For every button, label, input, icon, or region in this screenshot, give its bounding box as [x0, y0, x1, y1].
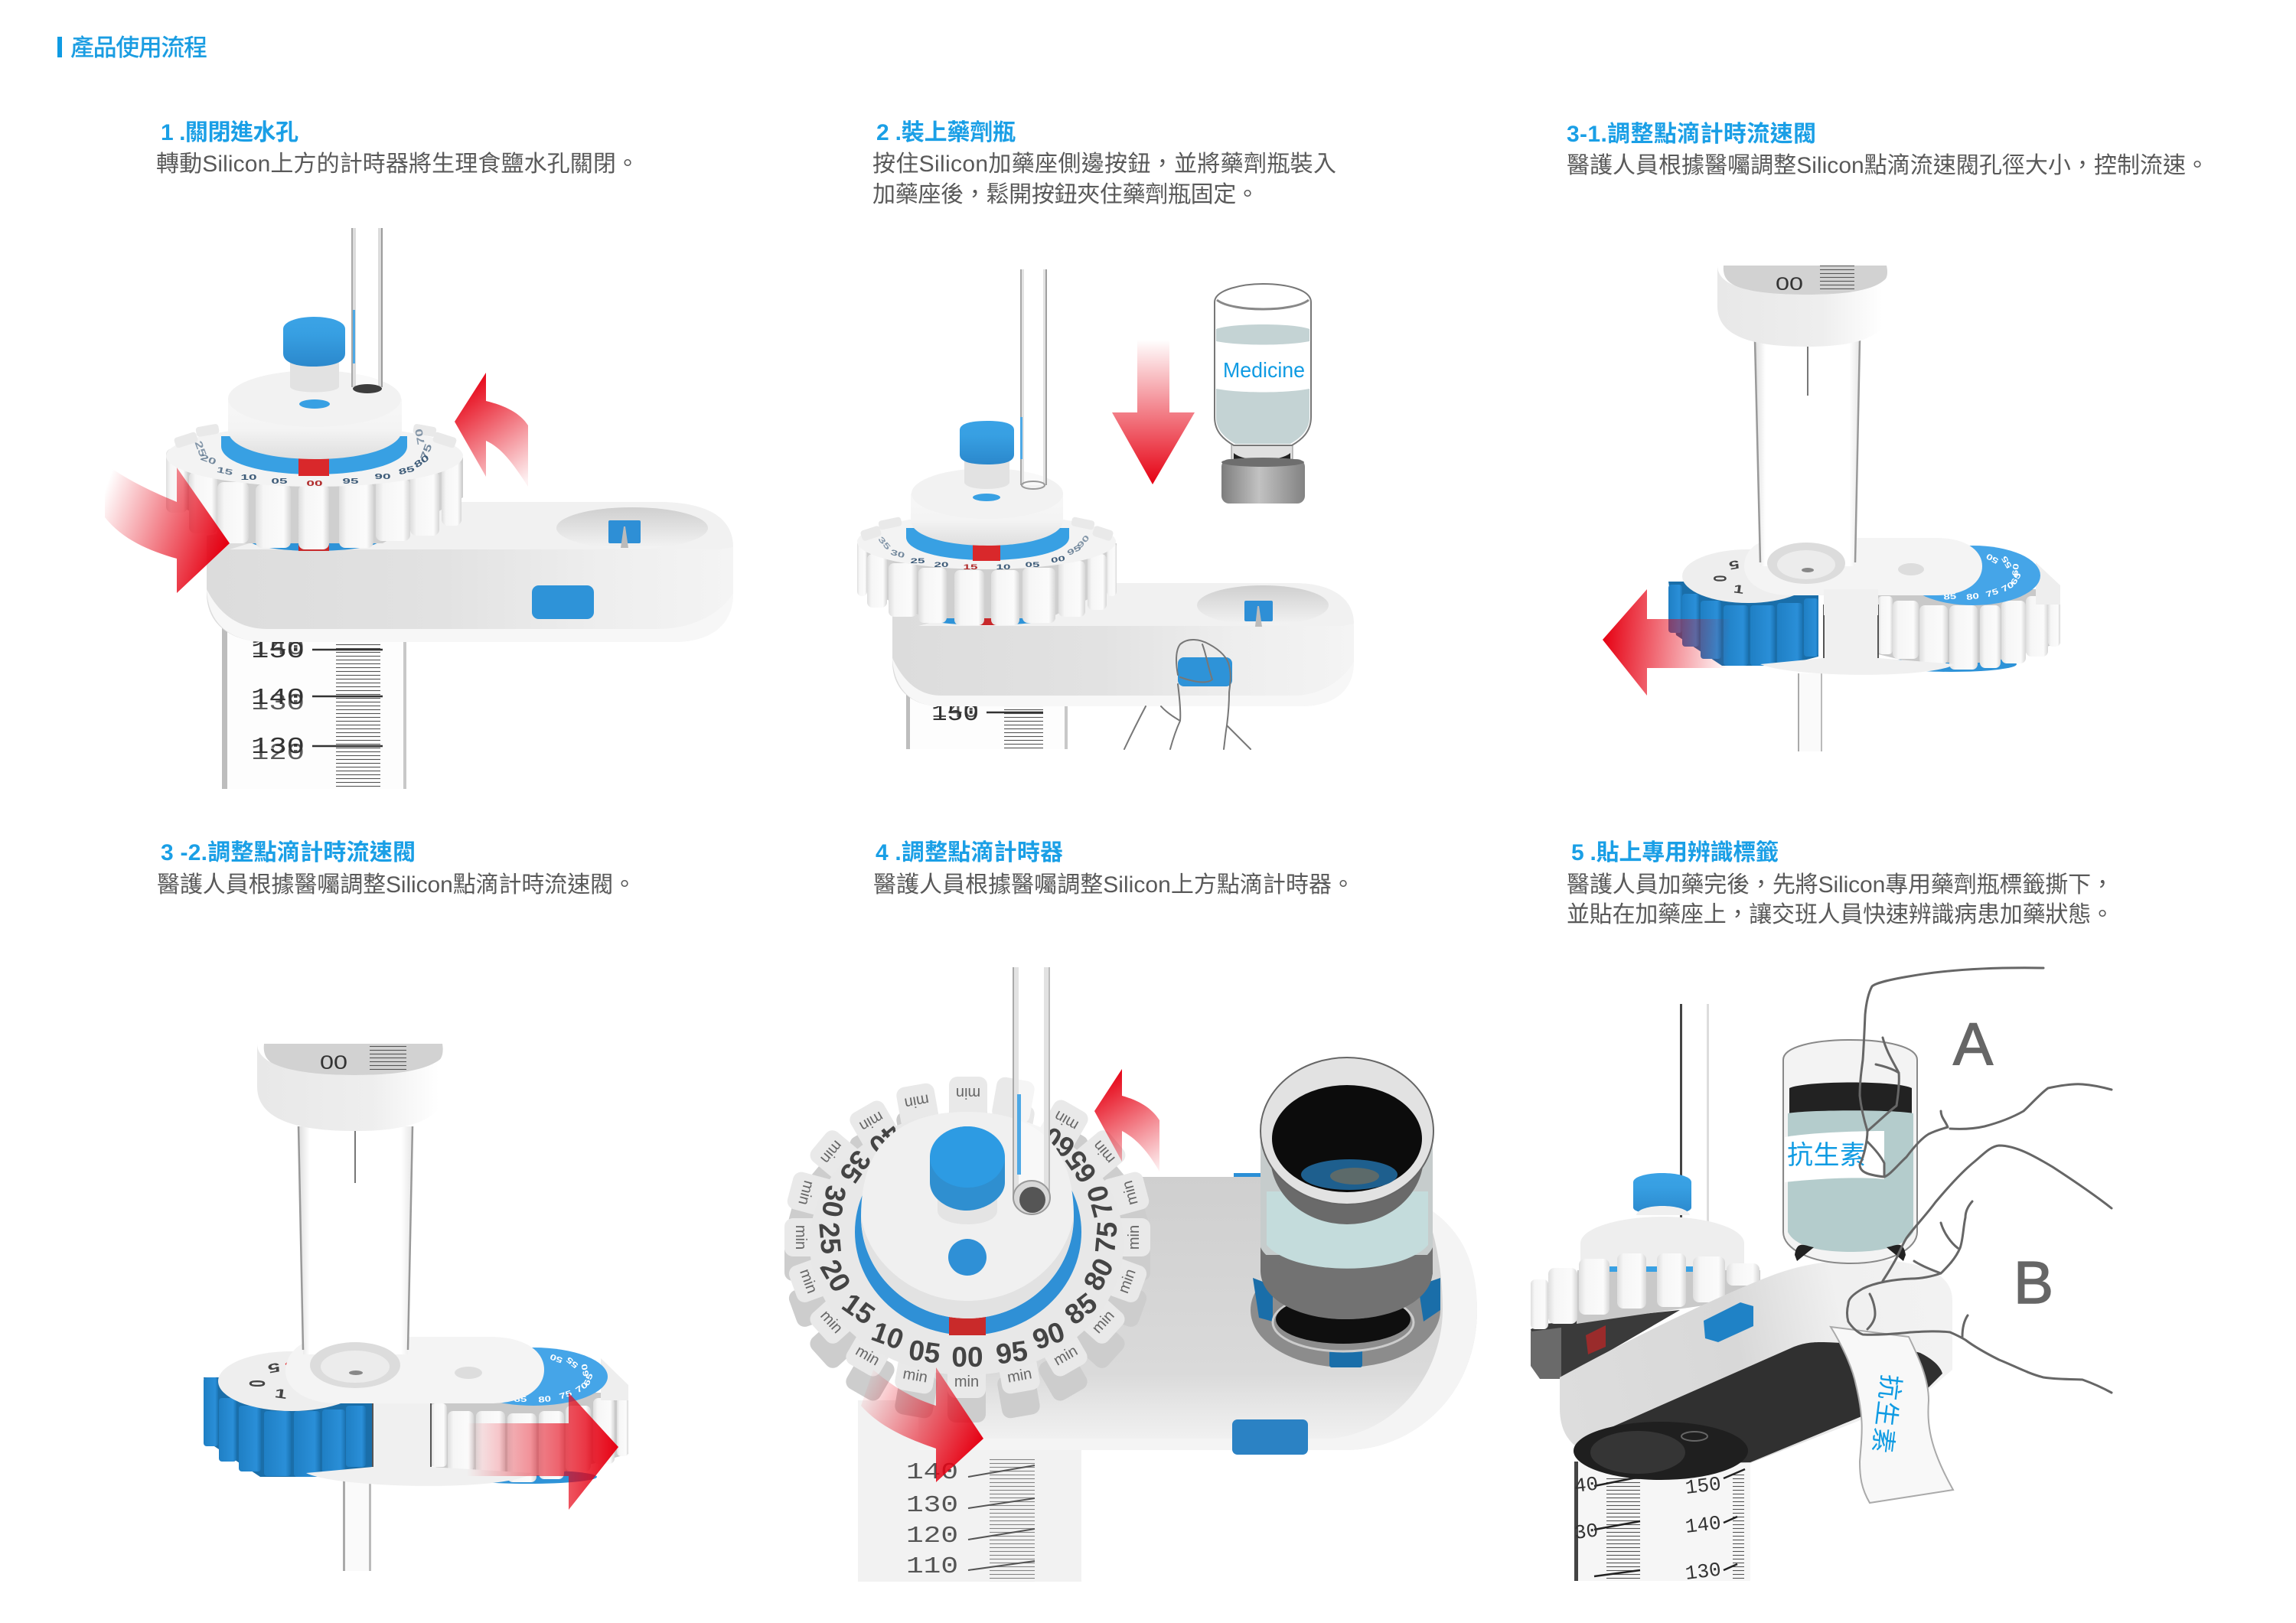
left valve wheel [204, 1351, 373, 1477]
gear numbers: 60 [1037, 1120, 1081, 1164]
blue ring and red mark [906, 528, 1069, 561]
top plate [285, 1337, 544, 1403]
right timer gear [1878, 546, 2060, 672]
drip chamber with scale: 120 [251, 740, 305, 767]
timer gear: 80 [413, 453, 432, 470]
panel: step 3-1 [1567, 122, 2209, 751]
central bridge [1760, 605, 1955, 675]
gear unit labels: min [817, 1307, 846, 1337]
drip chamber with scale: 130 [251, 690, 305, 717]
button on cap [960, 421, 1014, 489]
arrow: push gear [105, 464, 230, 593]
dark underside [1580, 1342, 1942, 1465]
gear unit labels: min [794, 1178, 817, 1207]
timer gear: 30 [889, 547, 906, 560]
left valve wheel: 1 [274, 1386, 288, 1402]
drip chamber: 140 [931, 698, 979, 725]
timer gear: 95 [342, 477, 359, 486]
gear numbers: 80 [1078, 1253, 1120, 1295]
text: step 5 description: 並貼在加藥座上，讓交班人員快速辨識病患加藥狀態。 [1567, 902, 2114, 927]
base arm [207, 502, 733, 642]
drip chamber with scale: 120 [906, 1523, 958, 1550]
heading: step 4: 4 .調整點滴計時器 [876, 840, 1063, 865]
right timer gear: 50 [549, 1352, 564, 1365]
timer gear [857, 514, 1117, 625]
right timer gear: 80 [538, 1393, 552, 1404]
gear unit labels: min [1052, 1107, 1081, 1134]
drip chamber with scale: 140 [1684, 1511, 1722, 1539]
drip chamber with scale: 120 [251, 787, 305, 813]
arrow: turn gear [861, 1367, 983, 1482]
drip chamber with scale: 40 [1573, 1472, 1600, 1498]
heading: step 3-2: 3 -2.調整點滴計時流速閥 [161, 840, 416, 865]
chamber opening [1574, 1422, 1748, 1480]
left valve wheel: 5 [1728, 557, 1740, 572]
timer gear: 95 [1065, 543, 1083, 557]
timer gear: 70 [413, 428, 427, 445]
drip chamber [906, 695, 1068, 749]
button on cap [1633, 1173, 1691, 1215]
gear unit labels: min [1051, 1342, 1081, 1369]
text: step 3-1 description: 醫護人員根據醫囑調整Silicon點滴流速閥孔徑大小，控制流速。 [1567, 153, 2209, 178]
tube below [1798, 673, 1822, 751]
central bridge [306, 1400, 533, 1486]
timer gear: 25 [192, 439, 208, 458]
valve socket [1767, 543, 1845, 584]
timer gear [784, 1076, 1151, 1423]
cap [228, 370, 402, 459]
gear numbers: 20 [814, 1254, 857, 1297]
timer gear: 20 [199, 452, 217, 467]
left valve wheel [1668, 549, 1818, 666]
side button [1704, 1302, 1753, 1342]
arrow: rotate [1094, 1069, 1159, 1172]
gear numbers [813, 1118, 1124, 1373]
gear unit labels: min [1115, 1266, 1140, 1295]
valve socket [310, 1342, 400, 1388]
gear unit labels [792, 1084, 1143, 1390]
drip chamber with scale [1573, 1462, 1750, 1586]
side button [1232, 1419, 1308, 1455]
hand outline [1124, 640, 1251, 749]
gear unit labels: min [1006, 1365, 1033, 1387]
gear numbers: 25 [813, 1221, 847, 1255]
gear numbers: 90 [1029, 1315, 1069, 1356]
right timer gear: 70 [2000, 579, 2015, 594]
gear unit labels: min [956, 1084, 980, 1101]
gear unit labels: min [817, 1137, 846, 1167]
text: step 4 description: 醫護人員根據醫囑調整Silicon上方點滴計時器。 [873, 872, 1355, 898]
button on cap [930, 1126, 1005, 1224]
blue dial [1906, 546, 2040, 605]
gear numbers: 30 [816, 1183, 852, 1220]
timer gear: 00 [306, 479, 323, 488]
panel: step 3-2 [157, 840, 636, 1571]
drip chamber: 150 [931, 701, 979, 728]
gear numbers: 35 [833, 1145, 877, 1188]
drip tube [351, 228, 383, 393]
right timer gear: 55 [1999, 555, 2014, 570]
gear unit labels: min [902, 1365, 929, 1387]
timer gear [1531, 1253, 1760, 1379]
gear numbers: 00 [951, 1341, 983, 1373]
text: step 2 description: 加藥座後，鬆開按鈕夾住藥劑瓶固定。 [872, 182, 1259, 207]
blue ring and red mark [855, 1129, 1081, 1335]
arrow: insert downward [1112, 340, 1195, 484]
heading: step 5: 5 .貼上專用辨識標籤 [1571, 840, 1779, 865]
drip chamber: 140 [931, 746, 979, 773]
blue dial [459, 1348, 608, 1406]
right timer gear: 55 [564, 1355, 580, 1370]
timer gear: 10 [996, 563, 1011, 571]
drip chamber with scale: 110 [906, 1553, 958, 1580]
arrow: pull left [1603, 589, 1730, 696]
hand A outline [1860, 968, 2112, 1177]
gear unit labels: min [1119, 1178, 1142, 1207]
timer gear: 20 [934, 561, 949, 569]
text: step 5 description: 醫護人員加藥完後，先將Silicon專用藥劑瓶標籤撕下， [1567, 872, 2114, 898]
arrow: pull right [467, 1393, 618, 1510]
scale number: 00 [1776, 274, 1803, 295]
tag text: 抗生素 [1867, 1373, 1906, 1455]
heading: step 1: 1 .關閉進水孔 [161, 120, 298, 145]
drip chamber with scale: 140 [906, 1459, 958, 1486]
timer gear: 15 [216, 465, 234, 477]
side button [1178, 657, 1232, 686]
timer gear: 90 [1075, 533, 1091, 550]
timer gear: 15 [964, 563, 978, 571]
drip chamber with scale [858, 1400, 1081, 1582]
drip chamber with scale: 150 [251, 638, 305, 665]
base arm [892, 583, 1354, 706]
gear unit labels: min [1126, 1225, 1143, 1250]
gear numbers: 70 [1081, 1182, 1120, 1221]
cap [911, 468, 1063, 546]
right timer gear: 75 [1985, 586, 2000, 599]
gear numbers: 75 [1089, 1221, 1124, 1254]
gear unit labels: min [1090, 1137, 1119, 1167]
left valve wheel: 5 [266, 1360, 281, 1376]
right timer gear: 60 [579, 1363, 591, 1377]
right timer gear: 65 [582, 1372, 595, 1387]
text: step 2 description: 按住Silicon加藥座側邊按鈕，並將藥劑瓶裝入 [872, 152, 1336, 177]
base arm [918, 1177, 1477, 1455]
gear numbers: 65 [1059, 1145, 1103, 1188]
vial with label [1783, 1040, 1917, 1263]
hole in base [556, 507, 708, 549]
right timer gear: 70 [574, 1380, 589, 1395]
page title: 產品使用流程 [70, 34, 207, 61]
timer gear: 05 [1026, 561, 1040, 569]
drip chamber with scale [222, 628, 406, 789]
gear unit labels: min [856, 1108, 886, 1135]
text: step 5 description [1567, 872, 2114, 927]
gear numbers: 40 [863, 1118, 908, 1162]
timer gear: 05 [271, 477, 288, 486]
gear unit labels: min [853, 1342, 882, 1369]
cap [861, 1112, 1074, 1318]
panel: step 1 [105, 120, 733, 813]
drip chamber with scale: 30 [1573, 1519, 1600, 1545]
panel: step 2 [857, 120, 1354, 773]
heading: step 2: 2 .裝上藥劑瓶 [876, 120, 1016, 145]
right timer gear: 85 [1943, 592, 1956, 601]
clip in hole [608, 520, 641, 548]
left valve wheel: 0 [245, 1380, 269, 1387]
gear numbers: 10 [867, 1315, 908, 1356]
gear unit labels: min [903, 1090, 931, 1112]
right timer gear: 80 [1965, 591, 1980, 602]
left valve wheel: 0 [1709, 575, 1729, 582]
panel: step 4 [784, 840, 1477, 1582]
timer gear: 90 [374, 472, 391, 481]
scale number: 00 [320, 1052, 347, 1074]
panel: step 5 [1531, 840, 2114, 1586]
right timer gear: 60 [2011, 563, 2020, 577]
drip tube [1680, 1004, 1709, 1222]
label B: B [2014, 1249, 2053, 1316]
vial label: Medicine [1223, 358, 1305, 382]
heading: step 3-1: 3-1.調整點滴計時流速閥 [1567, 122, 1816, 147]
timer gear: 00 [1050, 554, 1066, 565]
arrow: rotate [455, 373, 528, 487]
label A: A [1953, 1010, 1993, 1077]
drip chamber upper [1717, 266, 1891, 566]
timer gear: 85 [398, 464, 416, 477]
gear numbers: 95 [994, 1335, 1029, 1370]
timer gear: 25 [911, 557, 925, 565]
peeled label tag [1831, 1327, 1953, 1503]
drip chamber with scale: 140 [251, 685, 305, 712]
gear numbers: 85 [1058, 1287, 1103, 1331]
blue tab behind base [1234, 1173, 1264, 1178]
right timer gear: 50 [1985, 552, 2000, 566]
left valve wheel: 1 [1733, 582, 1744, 597]
hole in base [1251, 1253, 1440, 1367]
vial seen from above [1261, 1058, 1433, 1351]
timer gear: 35 [876, 535, 892, 552]
gear unit labels: min [1089, 1307, 1118, 1337]
tube below [343, 1481, 371, 1571]
right timer gear [431, 1348, 628, 1484]
gear unit labels: min [954, 1374, 979, 1390]
timer gear [166, 423, 463, 551]
hand B outline [1848, 1146, 2112, 1393]
gear numbers: 05 [907, 1334, 942, 1370]
gear numbers: 15 [837, 1287, 880, 1331]
drip chamber with scale: 130 [906, 1492, 958, 1519]
blue ring and red mark [221, 436, 407, 476]
side button [532, 585, 594, 619]
text: step 2 description [872, 152, 1336, 207]
hole in base [1197, 585, 1329, 625]
drip chamber with scale: 140 [251, 635, 305, 662]
drip chamber with scale: 130 [251, 734, 305, 761]
cap [1580, 1217, 1744, 1270]
gear unit labels: min [792, 1225, 809, 1250]
timer gear: 10 [240, 473, 257, 482]
drip chamber upper [257, 1044, 448, 1354]
text: step 1 description: 轉動Silicon上方的計時器將生理食鹽水孔關閉。 [156, 152, 639, 177]
drip tube [1020, 269, 1047, 489]
top plate [1744, 538, 1982, 615]
text: step 3-2 description: 醫護人員根據醫囑調整Silicon點滴計時流速閥。 [157, 872, 636, 898]
base arm [1560, 1260, 1952, 1465]
button on cap [283, 317, 345, 392]
vial label text: 抗生素 [1787, 1141, 1866, 1170]
drip tube [1013, 967, 1050, 1214]
vial [1215, 284, 1311, 504]
timer gear: 75 [419, 442, 435, 461]
right timer gear: 85 [514, 1394, 527, 1403]
right timer gear: 65 [2008, 571, 2023, 586]
drip chamber with scale: 130 [1684, 1558, 1722, 1586]
clip in hole [1244, 601, 1273, 627]
gear unit labels: min [796, 1266, 820, 1295]
indicator dot [948, 1239, 987, 1276]
right timer gear: 75 [558, 1388, 573, 1401]
drip chamber with scale: 150 [1684, 1472, 1722, 1500]
